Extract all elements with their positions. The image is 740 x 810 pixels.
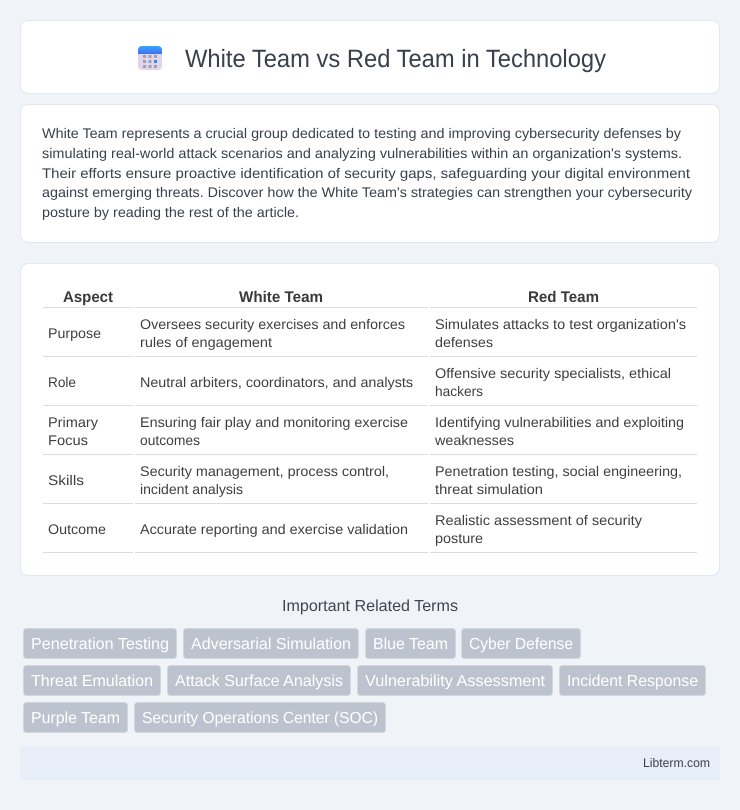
related terms tags: Adversarial Simulation bbox=[191, 636, 351, 653]
row: role: Neutral arbiters, coordinators, and analysts bbox=[140, 374, 413, 390]
related terms tags: Vulnerability Assessment bbox=[365, 673, 546, 690]
related terms tags: Blue Team bbox=[373, 636, 448, 653]
row: role: Offensive security specialists, ethical bbox=[435, 365, 671, 381]
intro paragraph: White Team represents a crucial group dedicated to testing and improving cybersecurity defenses by bbox=[42, 125, 681, 141]
related terms tags: Penetration Testing bbox=[31, 636, 169, 653]
row: purpose bbox=[48, 316, 686, 350]
row: skills: Security management, process control, bbox=[140, 463, 389, 479]
related terms tags: Attack Surface Analysis bbox=[175, 673, 343, 690]
related terms heading: Important Related Terms bbox=[282, 598, 458, 615]
row: skills: incident analysis bbox=[140, 481, 243, 497]
table header: Red Team bbox=[528, 289, 599, 306]
row: primary focus: Identifying vulnerabilities and exploiting bbox=[435, 414, 684, 430]
related terms tags: Purple Team bbox=[31, 710, 120, 727]
row: primary focus: Primary bbox=[48, 414, 98, 430]
row: skills: Skills bbox=[48, 472, 84, 488]
row: skills bbox=[48, 463, 682, 497]
row: skills: threat simulation bbox=[435, 481, 543, 497]
intro card bbox=[20, 104, 720, 242]
table header bbox=[63, 289, 599, 306]
row: purpose: defenses bbox=[435, 334, 493, 350]
row: role bbox=[48, 365, 671, 399]
row: primary focus: outcomes bbox=[140, 432, 200, 448]
row: primary focus: Ensuring fair play and monitoring exercise bbox=[140, 414, 408, 430]
related terms tags: Security Operations Center (SOC) bbox=[142, 710, 378, 727]
row: outcome bbox=[48, 512, 642, 546]
related terms tags: Cyber Defense bbox=[469, 636, 573, 653]
title: White Team vs Red Team in Technology bbox=[185, 45, 606, 73]
row: primary focus bbox=[48, 414, 684, 448]
row: purpose: rules of engagement bbox=[140, 334, 272, 350]
row: outcome: Accurate reporting and exercise validation bbox=[140, 521, 408, 537]
header card bbox=[20, 20, 720, 94]
row: purpose: Oversees security exercises and enforces bbox=[140, 316, 405, 332]
icon: calendar bbox=[138, 46, 162, 70]
intro paragraph: against emerging threats. Discover how the White Team's strategies can strengthen your cybersecurity bbox=[42, 184, 692, 200]
related terms tags: Threat Emulation bbox=[31, 673, 153, 690]
row: purpose: Purpose bbox=[48, 325, 101, 341]
row: primary focus: weaknesses bbox=[434, 432, 514, 448]
row: role: hackers bbox=[435, 383, 483, 399]
intro paragraph: simulating real-world attack scenarios and analyzing vulnerabilities within an organization's systems. bbox=[42, 145, 682, 161]
comparison table panel bbox=[20, 264, 720, 576]
row: skills: Penetration testing, social engineering, bbox=[435, 463, 682, 479]
row: outcome: Realistic assessment of security bbox=[435, 512, 642, 528]
footer bbox=[20, 746, 720, 780]
table header: White Team bbox=[239, 289, 323, 306]
row: purpose: Simulates attacks to test organization's bbox=[435, 316, 686, 332]
intro paragraph: posture by reading the rest of the article. bbox=[42, 204, 299, 220]
related terms tags bbox=[24, 628, 706, 732]
row: outcome: posture bbox=[435, 530, 483, 546]
related terms tags: Incident Response bbox=[567, 673, 698, 690]
row: role: Role bbox=[48, 374, 76, 390]
intro paragraph bbox=[42, 125, 692, 220]
footer: Libterm.com bbox=[643, 756, 710, 770]
row: primary focus: Focus bbox=[48, 432, 88, 448]
row: outcome: Outcome bbox=[48, 521, 106, 537]
intro paragraph: Their efforts ensure proactive identification of security gaps, safeguarding your digital environment bbox=[42, 165, 690, 181]
table header: Aspect bbox=[63, 289, 113, 306]
